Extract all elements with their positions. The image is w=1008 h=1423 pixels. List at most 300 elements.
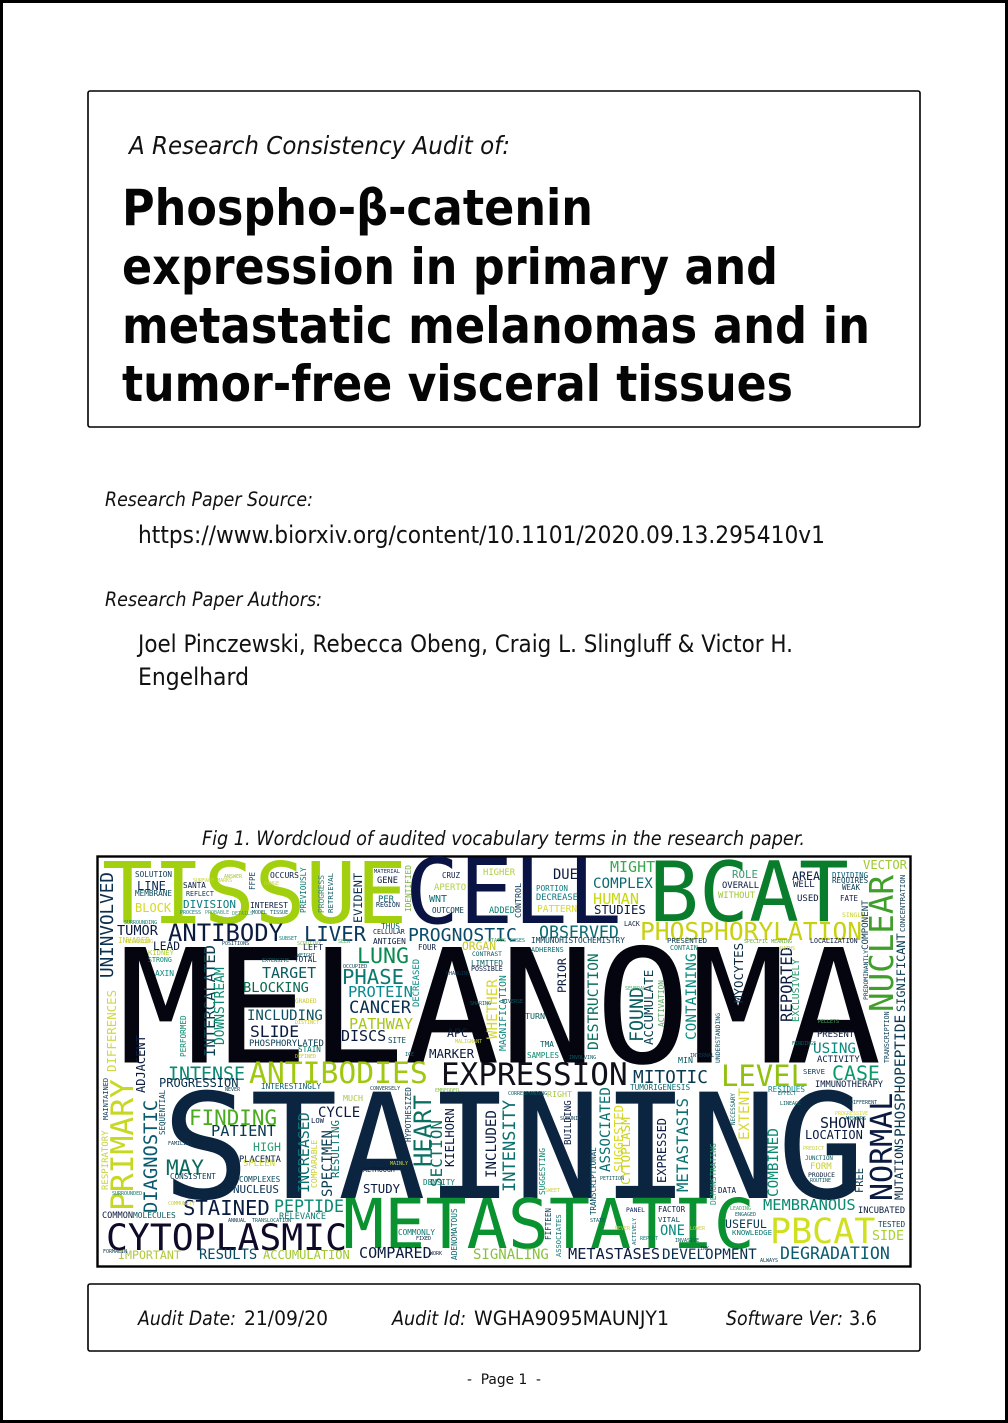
tiny background words: FINDINGS (792, 1041, 816, 1047)
medium horizontal words: METASTASES (568, 1245, 660, 1263)
medium vertical words: MYOCYTES (731, 943, 746, 1003)
tiny background words: FIXED (416, 1236, 431, 1242)
authors heading: Research Paper Authors: (105, 588, 322, 611)
audit id: WGHA9095MAUNJY1 (474, 1307, 669, 1330)
medium horizontal words: PEPTIDE (274, 1197, 344, 1216)
medium horizontal words: HIGHER (483, 868, 516, 878)
medium horizontal words: MAY (166, 1156, 204, 1180)
medium vertical words: FFPE (248, 871, 257, 890)
medium horizontal words: LIVER (304, 922, 367, 946)
source url: https://www.biorxiv.org/content/10.1101/2020.09.13.295410v1 (138, 521, 825, 549)
medium horizontal words: MARKER (429, 1046, 475, 1061)
medium horizontal words: APC (447, 1026, 468, 1040)
medium vertical words: DECREASED (412, 959, 422, 1007)
tiny background words: REPEAT (640, 1236, 658, 1242)
tiny background words: SEEN (338, 939, 350, 945)
authors list (136, 630, 793, 691)
medium vertical words: COMPARABLE (310, 1140, 319, 1188)
medium vertical words: SECTION (427, 1120, 446, 1187)
medium vertical words: CONCENTRATION (898, 875, 907, 932)
medium vertical words: INCREASED (295, 1112, 313, 1193)
medium horizontal words: MITOTIC (633, 1067, 708, 1088)
medium horizontal words: ROLE (732, 868, 758, 881)
medium horizontal words: ANTIBODY (168, 919, 283, 947)
title: expression in primary and (122, 238, 778, 296)
tiny background words: RANGE (264, 881, 279, 887)
medium horizontal words: HUMAN (593, 890, 639, 908)
medium vertical words: UNINVOLVED (98, 872, 118, 978)
tiny background words: SUBSET (279, 936, 297, 942)
tiny background words: PROBABLE (205, 910, 229, 916)
tiny background words: ALWAYS (760, 1258, 778, 1264)
medium vertical words: PROGRESS (317, 875, 326, 913)
medium horizontal words: PRODUCE (808, 1171, 835, 1179)
medium horizontal words: PATTERN (537, 904, 577, 915)
medium vertical words: ADJACENT (134, 1035, 148, 1093)
tiny background words: PETITION (600, 1176, 624, 1182)
medium horizontal words: RESULTS (199, 1247, 257, 1263)
medium vertical words: ADENOMATOUS (450, 1208, 459, 1260)
medium horizontal words: PHASE (342, 965, 404, 989)
medium vertical words: PREDOMINANTLY (862, 950, 870, 1000)
medium horizontal words: OVERALL (722, 881, 759, 891)
medium vertical words: EVIDENT (351, 873, 365, 923)
medium vertical words: METASTASIS (674, 1098, 692, 1192)
tiny background words: EXTENSIVE (262, 958, 289, 964)
medium horizontal words: CELLULAR (373, 928, 405, 936)
medium horizontal words: MIN (678, 1055, 693, 1065)
tiny background words: OCCUPIED (343, 964, 367, 970)
tiny background words: LOWER (690, 1226, 706, 1232)
medium vertical words: PERFORMED (179, 1015, 188, 1057)
medium horizontal words: RELEVANCE (279, 1212, 326, 1222)
tiny background words: STATE (590, 1218, 605, 1224)
medium horizontal words: STRONG (148, 956, 172, 964)
tiny background words: WEIGHT (297, 953, 315, 959)
tiny background words: POSITIONS (222, 941, 249, 947)
panel: audit footer (88, 1284, 920, 1351)
medium horizontal words: HIGH (253, 1140, 281, 1154)
medium vertical words: DIFFERENCES (104, 990, 119, 1072)
medium horizontal words: IMPORTANT (118, 1248, 181, 1262)
medium horizontal words: WELL (793, 880, 815, 890)
medium horizontal words: FACTOR (658, 1205, 686, 1214)
medium vertical words: PRIOR (555, 958, 569, 993)
medium horizontal words: SAMPLES (527, 1051, 559, 1060)
medium horizontal words: SANTA (183, 881, 206, 890)
medium horizontal words: FORM (810, 1162, 832, 1172)
medium vertical words: EXCLUSIVELY (791, 959, 802, 1022)
medium horizontal words: GENE (377, 876, 398, 886)
medium horizontal words: AXIN (155, 969, 174, 978)
title: metastatic melanomas and in (122, 297, 870, 355)
audit subtitle: A Research Consistency Audit of: (127, 131, 510, 160)
medium horizontal words: NUCLEUS (233, 1183, 279, 1196)
tiny background words: WORK (430, 1251, 442, 1257)
medium vertical words: HYPOTHESIZED (404, 1087, 413, 1142)
tiny background words: STATUS (488, 938, 506, 944)
software version: 3.6 (849, 1307, 877, 1330)
medium horizontal words: RIGHT (547, 1089, 572, 1099)
medium vertical words: RESPIRATORY (101, 1130, 111, 1190)
medium horizontal words: CONTAIN (670, 944, 698, 952)
medium horizontal words: LINE (137, 879, 166, 893)
audit id (390, 1307, 669, 1330)
medium horizontal words: PROGNOSTIC (408, 925, 517, 946)
tiny background words: DIFFERENT (850, 1100, 877, 1106)
medium horizontal words: REFLECT (186, 890, 214, 898)
medium horizontal words: DENSITY (423, 1178, 455, 1187)
medium vertical words: CYTOPLASM (618, 1117, 633, 1185)
medium horizontal words: STUDIES (594, 903, 646, 917)
tiny background words: ANSWERS (845, 1116, 866, 1122)
tiny background words: SEVERAL (625, 986, 646, 992)
medium horizontal words: PROTEIN (348, 983, 413, 1001)
medium horizontal words: DIVIDING (832, 871, 869, 880)
tiny background words: INVOLVING (569, 1055, 596, 1061)
tiny background words: MAINLY (390, 1161, 408, 1167)
tiny background words: SCRUTINY (297, 941, 321, 947)
word: PRIMARY: PRIMARY (105, 1079, 141, 1211)
medium horizontal words: JUNCTION (805, 1156, 833, 1162)
medium horizontal words: WITHOUT (718, 891, 756, 901)
word: EXPRESSION: EXPRESSION (441, 1057, 628, 1093)
medium horizontal words: LEAD (153, 940, 180, 953)
medium horizontal words: SPLEEN (243, 1159, 275, 1169)
medium vertical words: HEART (409, 1095, 437, 1167)
medium horizontal words: INCUBATED (858, 1206, 905, 1216)
medium horizontal words: BLOCK (135, 901, 172, 915)
medium horizontal words: VECTOR (863, 858, 908, 872)
tiny background words: ICE (405, 1052, 414, 1058)
medium vertical words: SUGGESTING (538, 1148, 547, 1195)
tiny background words (103, 874, 877, 1264)
tiny background words: ENGAGED (735, 1212, 756, 1218)
tiny background words: REGARDING (126, 939, 153, 945)
medium horizontal words: LUNG (357, 944, 409, 969)
tiny background words: DEFINED (295, 1054, 316, 1060)
tiny background words: LINEAGE (780, 1101, 801, 1107)
word: PHOSPHORYLATION: PHOSPHORYLATION (640, 917, 862, 946)
tiny background words: MODEL TISSUE (252, 910, 288, 916)
medium horizontal words: CRUZ (442, 871, 461, 880)
medium horizontal words: INCLUDING (247, 1008, 323, 1024)
tiny background words: PROCESS (180, 910, 201, 916)
medium vertical words: RESULTING (329, 1120, 342, 1178)
medium vertical words: DIAGNOSTIC (141, 1100, 162, 1213)
medium horizontal words: DEGRADATION (780, 1244, 890, 1263)
word: STAINING: STAINING (162, 1063, 865, 1233)
medium vertical words: ACTIVATION (657, 980, 666, 1027)
panel: title box (88, 91, 920, 427)
medium horizontal words: TARGET (262, 964, 316, 982)
tiny background words: FORMALIN (103, 1249, 127, 1255)
medium horizontal words: TESTED (878, 1220, 906, 1229)
medium vertical words: DEMONSTRATING (709, 1143, 718, 1205)
medium horizontal words: PORTION (536, 884, 568, 893)
medium horizontal words: DISCS (341, 1027, 386, 1045)
medium horizontal words: COMMONLY (398, 1228, 435, 1237)
word: ANTIBODIES: ANTIBODIES (249, 1056, 428, 1091)
medium horizontal words: LEFT (303, 942, 323, 952)
medium horizontal words: KNOWLEDGE (732, 1228, 772, 1237)
medium horizontal words: CANCER (349, 998, 412, 1018)
medium vertical words: IDENTIFIED (404, 865, 413, 912)
medium horizontal words: MATERIAL (374, 869, 400, 875)
medium horizontal words: TOTAL (294, 955, 317, 964)
medium vertical words: CONTROL (513, 883, 523, 918)
figure caption: Fig 1. Wordcloud of audited vocabulary terms in the research paper. (202, 827, 805, 850)
medium horizontal words: SERVE (803, 1067, 825, 1076)
medium horizontal words: MOLECULES (133, 1211, 176, 1220)
medium horizontal words: INTENSE (168, 1064, 245, 1085)
tiny background words: INTERNAL (690, 1053, 714, 1059)
medium vertical words: INTERCALATED (201, 945, 219, 1057)
tiny background words: DIVERSE (502, 999, 523, 1005)
medium horizontal words: FATE (840, 894, 859, 903)
medium horizontal words: COMPARED (359, 1244, 432, 1262)
medium vertical words: SPECIMEN (320, 1130, 336, 1197)
medium vertical words: MUTATIONS (892, 1138, 906, 1200)
medium horizontal words: FOUR (418, 943, 437, 952)
medium vertical words: EXPRESSED (655, 1118, 669, 1183)
medium horizontal words: PATIENT (211, 1122, 276, 1140)
medium horizontal words: MUCH (343, 1093, 363, 1103)
medium vertical words: FOUND (627, 987, 648, 1042)
medium horizontal words: COMMON (102, 1211, 133, 1221)
medium horizontal words: ADHERENS (531, 946, 564, 954)
medium vertical words: UNDERSTANDING (714, 1013, 722, 1063)
medium horizontal words: REQUIRES (832, 876, 869, 885)
word: METASTATIC: METASTATIC (343, 1186, 755, 1265)
medium vertical words: REPORTED (778, 947, 796, 1022)
medium horizontal words: ADDED (489, 906, 515, 916)
medium horizontal words: OCCURS (270, 871, 299, 880)
medium horizontal words: CASE (832, 1062, 880, 1085)
medium horizontal words: SIGNALING (473, 1247, 549, 1263)
medium vertical words: BUILDING (563, 1100, 574, 1145)
medium horizontal words: OBSERVED (539, 923, 619, 942)
medium horizontal words: SINGLE (842, 911, 865, 919)
medium vertical words: DESTRUCTION (585, 953, 602, 1050)
medium horizontal words: PANEL (626, 1207, 645, 1214)
word: NORMAL: NORMAL (865, 1093, 900, 1201)
tiny background words: NEVER (225, 1087, 241, 1093)
audit date: Audit Date: (136, 1307, 236, 1330)
audit id: Audit Id: (390, 1307, 466, 1330)
medium vertical words: PHOSPHOPEPTIDE (893, 1015, 909, 1137)
tiny background words: NEVER (615, 1226, 631, 1232)
medium horizontal words: RESIDUES (768, 1085, 805, 1094)
medium horizontal words: LACK (624, 920, 640, 928)
medium horizontal words: LOW (311, 1116, 325, 1125)
medium horizontal words: CONTRAST (472, 951, 502, 958)
medium horizontal words: SLIDE (250, 1022, 299, 1041)
tiny background words: CONVERSELY (370, 1086, 400, 1092)
title (122, 179, 870, 413)
audit date: 21/09/20 (244, 1307, 328, 1330)
medium vertical words: FREE (854, 1168, 866, 1193)
word: CELL: CELL (405, 840, 622, 945)
medium horizontal words: GRADED (295, 998, 317, 1005)
medium horizontal words: LIMITED (471, 959, 503, 968)
medium vertical words: KIELHORN (443, 1108, 457, 1167)
medium horizontal words: THUS (381, 922, 400, 931)
medium horizontal words: APERTO (434, 883, 466, 893)
medium horizontal words: DUE (553, 867, 578, 883)
medium vertical words (98, 865, 909, 1260)
title: Phospho-β-catenin (122, 179, 593, 237)
medium horizontal words: INVADED (118, 936, 150, 945)
tiny background words: COMMUNITY (168, 1201, 195, 1207)
authors list: Engelhard (138, 663, 249, 691)
tiny background words: FAMILIAL (168, 1141, 192, 1147)
medium vertical words: MAGNIFICATION (498, 975, 509, 1051)
tiny background words: SWEET (545, 1188, 560, 1194)
medium horizontal words: PER (378, 895, 395, 905)
page number: - Page 1 - (467, 1372, 541, 1388)
tiny background words: PREDICT (803, 1146, 824, 1152)
medium vertical words: DOWNSTREAM (213, 967, 228, 1045)
tiny background words: EFFECT (778, 1091, 796, 1097)
tiny background words: ANNUAL (228, 1218, 246, 1224)
medium vertical words: PREVIOUSLY (299, 867, 308, 913)
medium vertical words: ACTIVELY (632, 1217, 638, 1245)
tiny background words: CORRESPONDING (508, 1091, 547, 1097)
medium horizontal words: INTERESTINGLY (261, 1082, 322, 1091)
medium horizontal words: PRESENT (817, 1030, 855, 1040)
medium horizontal words: DECREASE (536, 893, 578, 903)
medium horizontal words: ALTHOUGH (363, 1166, 395, 1174)
word: PBCAT: PBCAT (770, 1212, 875, 1252)
word: BCAT: BCAT (649, 844, 849, 941)
medium horizontal words: PHOSPHORYLATED (249, 1039, 324, 1049)
word: MELANOMA: MELANOMA (118, 916, 881, 1100)
medium horizontal words: LOCATION (805, 1128, 863, 1142)
medium vertical words: CONTAINING (684, 953, 700, 1040)
word: CYTOPLASMIC: CYTOPLASMIC (106, 1216, 347, 1259)
medium horizontal words: AREA (792, 869, 820, 883)
medium horizontal words: DEVELOPMENT (662, 1247, 757, 1263)
medium vertical words: NECESSARY (731, 1093, 737, 1125)
medium horizontal words: STUDY (363, 1182, 401, 1196)
medium horizontal words: COMPLEXES (239, 1175, 281, 1184)
medium horizontal words: IMMUNOTHERAPY (815, 1080, 884, 1090)
medium horizontal words: ORGAN (462, 940, 496, 953)
medium horizontal words: MEMBRANOUS (763, 1196, 856, 1214)
tiny background words: PELLETS (818, 1019, 839, 1025)
medium horizontal words: PATHWAY (349, 1015, 413, 1033)
audit date (136, 1307, 328, 1330)
medium horizontal words: BLOCKING (243, 980, 309, 996)
medium horizontal words: STAINED (183, 1196, 270, 1220)
medium horizontal words: SHOWN (820, 1114, 865, 1132)
medium vertical words: RETRIEVAL (326, 872, 335, 913)
authors list: Joel Pinczewski, Rebecca Obeng, Craig L. Slingluff & Victor H. (136, 630, 793, 658)
tiny background words: PROGRESSIVE (835, 1111, 868, 1117)
medium vertical words: INTENSITY (500, 1100, 520, 1192)
tiny background words: SUBUNIT (560, 1116, 581, 1122)
medium horizontal words: ACTIVITY (817, 1055, 860, 1065)
tiny background words: SURROUNDED (112, 1191, 142, 1197)
medium vertical words: MAINTAINED (102, 1078, 110, 1120)
medium horizontal words: PRESENTED (667, 936, 707, 945)
medium vertical words: TRANSCRIPTIONAL (589, 1147, 598, 1215)
medium horizontal words: OUTCOME (432, 906, 464, 915)
medium horizontal words: COMPLEX (593, 876, 653, 892)
medium horizontal words: WNT (429, 894, 447, 905)
medium horizontal words: SOLUTION (135, 870, 172, 879)
tiny background words: DISTINCT (295, 1020, 319, 1026)
medium vertical words: ASSOCIATES (554, 1214, 563, 1257)
medium vertical words: SIGNIFICANT (894, 933, 908, 1012)
medium horizontal words: ANTIGEN (373, 937, 406, 946)
medium horizontal words: ACCUMULATION (263, 1248, 350, 1262)
medium horizontal words: USING (813, 1041, 856, 1057)
medium horizontal words: VITAL (658, 1215, 681, 1224)
wordcloud figure (98, 840, 910, 1266)
medium horizontal words: POSSIBLE (471, 965, 503, 973)
medium horizontal words: FINDING (189, 1106, 277, 1130)
medium horizontal words: LOCALIZATION (810, 937, 858, 945)
medium horizontal words: MIGHT (610, 858, 655, 876)
medium horizontal words: SITE (388, 1036, 407, 1045)
medium vertical words: ASSOCIATED (598, 1087, 614, 1172)
medium vertical words: EXTENT (737, 1088, 753, 1140)
medium horizontal words: USEFUL (725, 1217, 767, 1231)
tiny background words: TRANSLOCATION (252, 1218, 291, 1224)
medium horizontal words: TURN (525, 1011, 545, 1021)
medium horizontal words: INTEREST (250, 901, 288, 910)
medium vertical words: COMPONENT (860, 900, 871, 950)
tiny background words: SURROUNDING (124, 920, 157, 926)
medium horizontal words: REGION (376, 901, 400, 909)
medium horizontal words: KIDNEY (148, 948, 175, 957)
tiny background words: DOSES (510, 938, 525, 944)
medium horizontal words: MEMBRANE (135, 889, 172, 898)
tiny background words: LEADING (730, 1206, 751, 1212)
medium horizontal words: CONSISTENT (170, 1172, 216, 1181)
tiny background words: CHANGING (446, 971, 470, 977)
medium horizontal words: IMMUNOHISTOCHEMISTRY (531, 936, 625, 945)
medium vertical words: FIFTEEN (544, 1208, 553, 1240)
medium horizontal words: PROGRESSION (159, 1076, 238, 1090)
medium vertical words: SEQUENTIAL (158, 1089, 167, 1135)
tiny background words: MALIGNANT (455, 1039, 482, 1045)
medium horizontal words: SIDE (872, 1229, 904, 1244)
tiny background words: PATHS (780, 946, 795, 952)
medium horizontal words: TUMOR (117, 923, 159, 939)
medium vertical words: WHETHER (485, 979, 501, 1039)
medium vertical words: TRANSCRIPTION (883, 1011, 891, 1063)
software version: Software Ver: (726, 1307, 843, 1330)
medium horizontal words: PLACENTA (239, 1155, 282, 1165)
title: tumor-free visceral tissues (122, 355, 793, 413)
tiny background words: SURFACE MARKS (193, 878, 232, 884)
medium horizontal words: USED (797, 894, 819, 904)
medium horizontal words (102, 858, 908, 1263)
tiny background words: INVASIVE (675, 1238, 699, 1244)
medium horizontal words: DIVISION (183, 898, 236, 911)
medium horizontal words: ONE (660, 1223, 685, 1239)
tiny background words: ANSWER (224, 874, 243, 880)
medium horizontal words: TMA (540, 1040, 554, 1049)
medium vertical words: INCLUDED (484, 1110, 500, 1178)
medium horizontal words: TUMORIGENESIS (630, 1083, 691, 1092)
tiny background words: EMBEDDED (435, 1088, 459, 1094)
word: NUCLEAR: NUCLEAR (863, 875, 901, 1012)
tiny background words: DETAILS (232, 911, 253, 917)
